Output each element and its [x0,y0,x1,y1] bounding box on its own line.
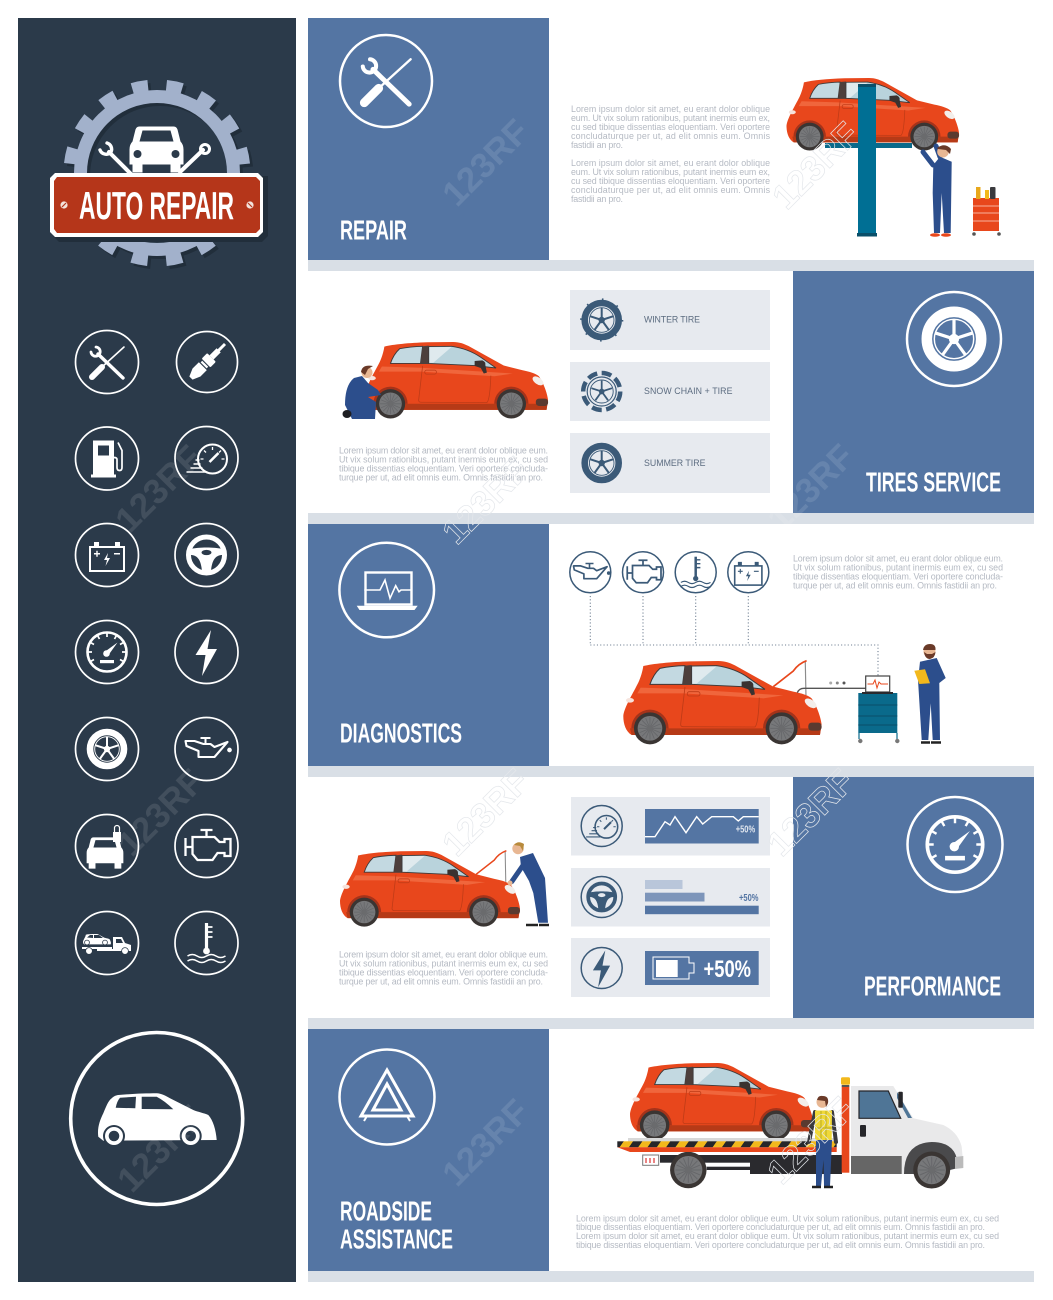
repair text: eum. Ut vix solum rationibus, putant inermis eum ex, [571,113,770,123]
repair text: Lorem ipsum dolor sit amet, eu erant dolor oblique [571,104,770,114]
illustration: car on lift [786,78,959,236]
tires text: turque per ut, ad elit omnis eum. Omnis fastidii an pro. [339,472,543,482]
heading: roadside assistance: ASSISTANCE [340,1224,453,1254]
stat row: acceleration [571,797,770,856]
icon: tow truck [76,912,138,974]
panel: tires service [339,271,1034,513]
performance text: turque per ut, ad elit omnis eum. Omnis fastidii an pro. [339,977,543,987]
truck cab [841,1077,963,1188]
diagnostics text: tibique dissentias eloquentiam. Veri oportere concluda- [793,572,1003,582]
tires text: tibique dissentias eloquentiam. Veri oportere concluda- [339,464,548,474]
roadside header block [308,1029,549,1271]
logo: auto repair badge [50,85,268,264]
icon: laptop pulse [339,543,434,637]
tire option: winter [570,290,770,350]
icon: battery [76,524,138,586]
roadside text: Lorem ipsum dolor sit amet, eu erant dolor oblique eum. Ut vix solum rationibus, putant inermis eum ex, cu sed [576,1231,999,1241]
icon: oil can [175,718,238,780]
stat row: battery: +50% [704,956,751,983]
icon: speedometer [76,620,138,684]
watermark text: 123RF [435,112,537,214]
sign plate: AUTO REPAIR [79,185,234,228]
diagnostics text: Lorem ipsum dolor sit amet, eu erant dolor oblique eum. [793,554,1003,564]
heading: roadside assistance [340,1196,453,1254]
repair text: concludaturque per ut, ad elit omnis eum. Omnis [571,185,771,195]
repair text: fastidii an pro. [571,140,623,150]
repair text: eum. Ut vix solum rationibus, putant inermis eum ex, [571,167,770,177]
gear emblem [69,85,248,264]
tire option: winter: WINTER TIRE [644,314,700,324]
repair text: Lorem ipsum dolor sit amet, eu erant dolor oblique [571,158,770,168]
figure: technician with clipboard [914,644,946,742]
repair text: concludaturque per ut, ad elit omnis eum. Omnis [571,131,771,141]
icon: speedometer [908,797,1002,892]
icon: tools [76,330,138,394]
illustration: diagnostic cable [797,682,866,693]
repair text [571,104,771,204]
roadside text: tibique dissentias eloquentiam. Veri oportere concludaturque per ut, ad elit omnis eum. Omnis fastidii an pro. [576,1240,985,1250]
diagnostics text: turque per ut, ad elit omnis eum. Omnis fastidii an pro. [793,580,997,590]
diagnostic icons [570,552,769,593]
section dividers [308,260,1034,1282]
icon: oil [570,552,611,593]
icon: large car badge [71,1032,243,1204]
repair text: cu sed tibique dissentias eloquentiam. Veri oportere [571,176,770,186]
tow truck chassis [643,1152,842,1188]
flatbed [617,1138,837,1152]
icon: fuel pump [76,427,138,490]
roadside text: tibique dissentias eloquentiam. Veri oportere concludaturque per ut, ad elit omnis eum. Omnis fastidii an pro. [576,1222,985,1232]
stat row: acceleration: +50% [736,825,755,836]
dotted connector lines [590,596,878,676]
illustration: car with mechanic at hood [340,842,549,927]
illustration: tool cart [972,187,1001,236]
panel: repair [308,18,1001,260]
tires text: Ut vix solum rationibus, putant inermis eum ex, cu sed [339,454,548,464]
sign plate [50,173,268,242]
watermark text: 123RF [435,450,537,552]
figure: mechanic under car [923,145,952,237]
illustration: diagnostic cart [858,676,900,743]
watermark text: 123RF [110,762,212,864]
icon: repair tools [340,35,432,127]
watermark text: 123RF [760,762,862,864]
watermark text: 123RF [760,437,862,539]
icon: crossed wrenches [100,143,210,174]
repair text: fastidii an pro. [571,194,623,204]
icon: battery [728,552,769,593]
heading: repair: REPAIR [340,214,407,246]
watermark text: 123RF [760,1090,862,1192]
icon grid [76,330,238,974]
performance text: tibique dissentias eloquentiam. Veri oportere concluda- [339,968,548,978]
tires text: Lorem ipsum dolor sit amet, eu erant dolor oblique eum. [339,446,548,456]
repair text: cu sed tibique dissentias eloquentiam. Veri oportere [571,122,770,132]
icon: tire [76,718,138,780]
watermark text [108,112,867,1200]
icon: spark plug [176,332,238,392]
tire option: snow chain [570,362,770,421]
figure: tow operator [809,1096,836,1187]
icon: temperature [675,552,716,593]
icon: engine [175,814,238,878]
roadside text [576,1213,999,1250]
watermark text: 123RF [765,115,867,217]
icon: acceleration gauge [175,426,238,490]
illustration: car with open hood [623,661,822,744]
icon: car lock [76,814,138,878]
stat row: steering: +50% [739,893,759,904]
tires header block [793,271,1034,513]
performance header block [793,777,1034,1018]
panel: roadside assistance [308,1029,999,1271]
heading: diagnostics: DIAGNOSTICS [340,718,462,748]
tire option: summer: SUMMER TIRE [644,458,706,468]
performance text: Ut vix solum rationibus, putant inermis eum ex, cu sed [339,959,548,969]
diagnostics text [793,554,1003,590]
performance text: Lorem ipsum dolor sit amet, eu erant dolor oblique eum. [339,950,548,960]
watermark text: 123RF [435,1092,537,1194]
performance text [339,950,548,987]
icon: steering wheel [175,524,238,586]
repair header block [308,18,549,260]
stat row: battery [571,938,770,997]
icon: lightning bolt [175,620,238,684]
watermark text: 123RF [108,438,210,540]
illustration: car with tire mechanic [342,342,548,419]
icon: coolant temperature [175,912,238,974]
diagnostics header block [308,524,549,766]
heading: roadside assistance: ROADSIDE [340,1196,432,1226]
tire option: snow chain: SNOW CHAIN + TIRE [644,386,733,396]
illustration: flatbed tow truck with car [617,1063,963,1188]
panel: left sidebar [18,18,296,1282]
tire option: summer [570,433,770,493]
icon: warning triangle [340,1050,434,1144]
panel: performance [339,777,1034,1018]
icon: car front [130,126,184,172]
diagnostics text: Ut vix solum rationibus, putant inermis eum ex, cu sed [793,562,1003,572]
icon: tire [907,292,1001,386]
panel: diagnostics [308,524,1003,766]
icon: engine [622,552,664,593]
watermark text: 123RF [435,762,537,864]
stat row: steering [571,868,770,926]
watermark text: 123RF [110,1098,212,1200]
tires text [339,446,548,482]
roadside text: Lorem ipsum dolor sit amet, eu erant dolor oblique eum. Ut vix solum rationibus, putant inermis eum ex, cu sed [576,1213,999,1223]
car on flatbed [630,1063,813,1140]
